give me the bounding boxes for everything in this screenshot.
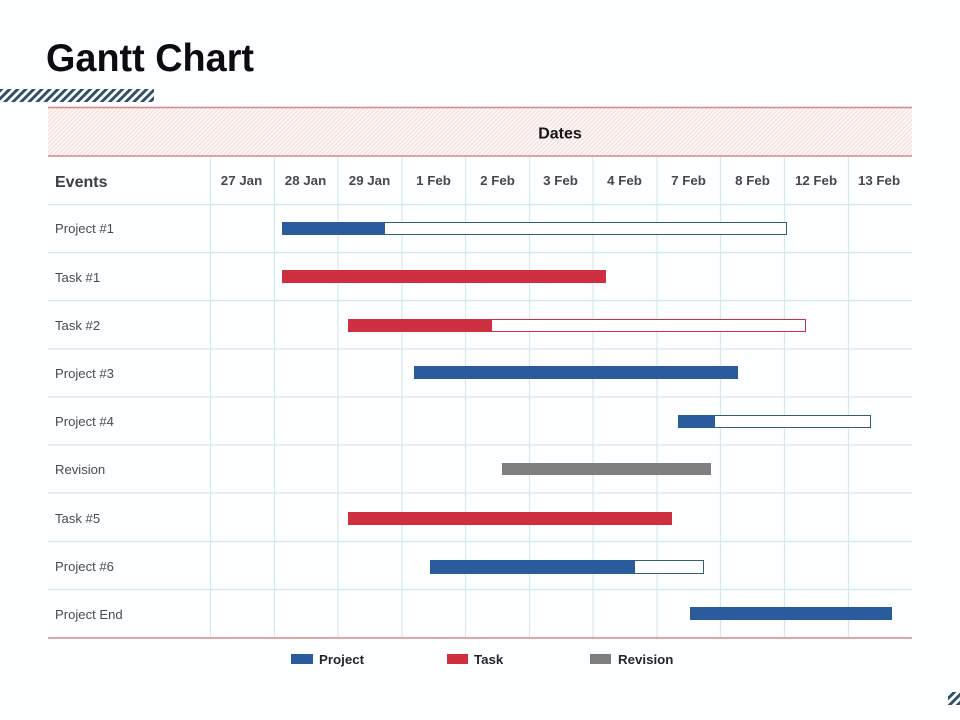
gantt bars — [282, 222, 892, 620]
events column heading: Events — [55, 174, 108, 191]
date labels: 8 Feb — [735, 173, 770, 188]
date labels: 1 Feb — [416, 173, 451, 188]
corner accent stripe — [948, 692, 960, 705]
bar: Task #1 — [282, 270, 606, 283]
date labels: 12 Feb — [795, 173, 837, 188]
title accent stripe — [0, 89, 154, 102]
bar: Project #4 — [678, 415, 870, 428]
dates heading: Dates — [538, 126, 582, 142]
date labels: 29 Jan — [349, 173, 390, 188]
date labels: 4 Feb — [607, 173, 642, 188]
bar: Project End — [690, 607, 892, 620]
event labels: Project #4 — [55, 414, 114, 429]
event labels: Task #5 — [55, 511, 100, 526]
bar: Task #5 — [348, 512, 672, 525]
bar: Task #2 — [348, 319, 806, 332]
legend: task: Task — [474, 652, 504, 667]
legend: project — [291, 652, 365, 667]
legend: project: Project — [319, 652, 365, 667]
event labels: Task #1 — [55, 270, 100, 285]
legend — [291, 652, 673, 667]
date labels: 2 Feb — [480, 173, 515, 188]
bar: Revision — [502, 463, 711, 475]
bar: Project #1 — [282, 222, 786, 235]
legend: revision — [590, 652, 673, 667]
date labels: 28 Jan — [285, 173, 326, 188]
date labels: 27 Jan — [221, 173, 262, 188]
event labels: Revision — [55, 462, 105, 477]
event labels: Project #6 — [55, 559, 114, 574]
dates header band — [48, 108, 912, 156]
legend: task — [447, 652, 504, 667]
event labels: Project #1 — [55, 221, 114, 236]
legend: revision: Revision — [618, 652, 673, 667]
title: Gantt Chart — [46, 37, 254, 80]
bar: Project #6 — [430, 560, 704, 574]
bar: Project #3 — [414, 366, 738, 379]
date labels: 3 Feb — [543, 173, 578, 188]
date labels: 7 Feb — [671, 173, 706, 188]
date labels: 13 Feb — [858, 173, 900, 188]
event labels — [55, 221, 123, 622]
event labels: Project #3 — [55, 366, 114, 381]
date labels — [221, 173, 900, 188]
event labels: Task #2 — [55, 318, 100, 333]
event labels: Project End — [55, 607, 123, 622]
